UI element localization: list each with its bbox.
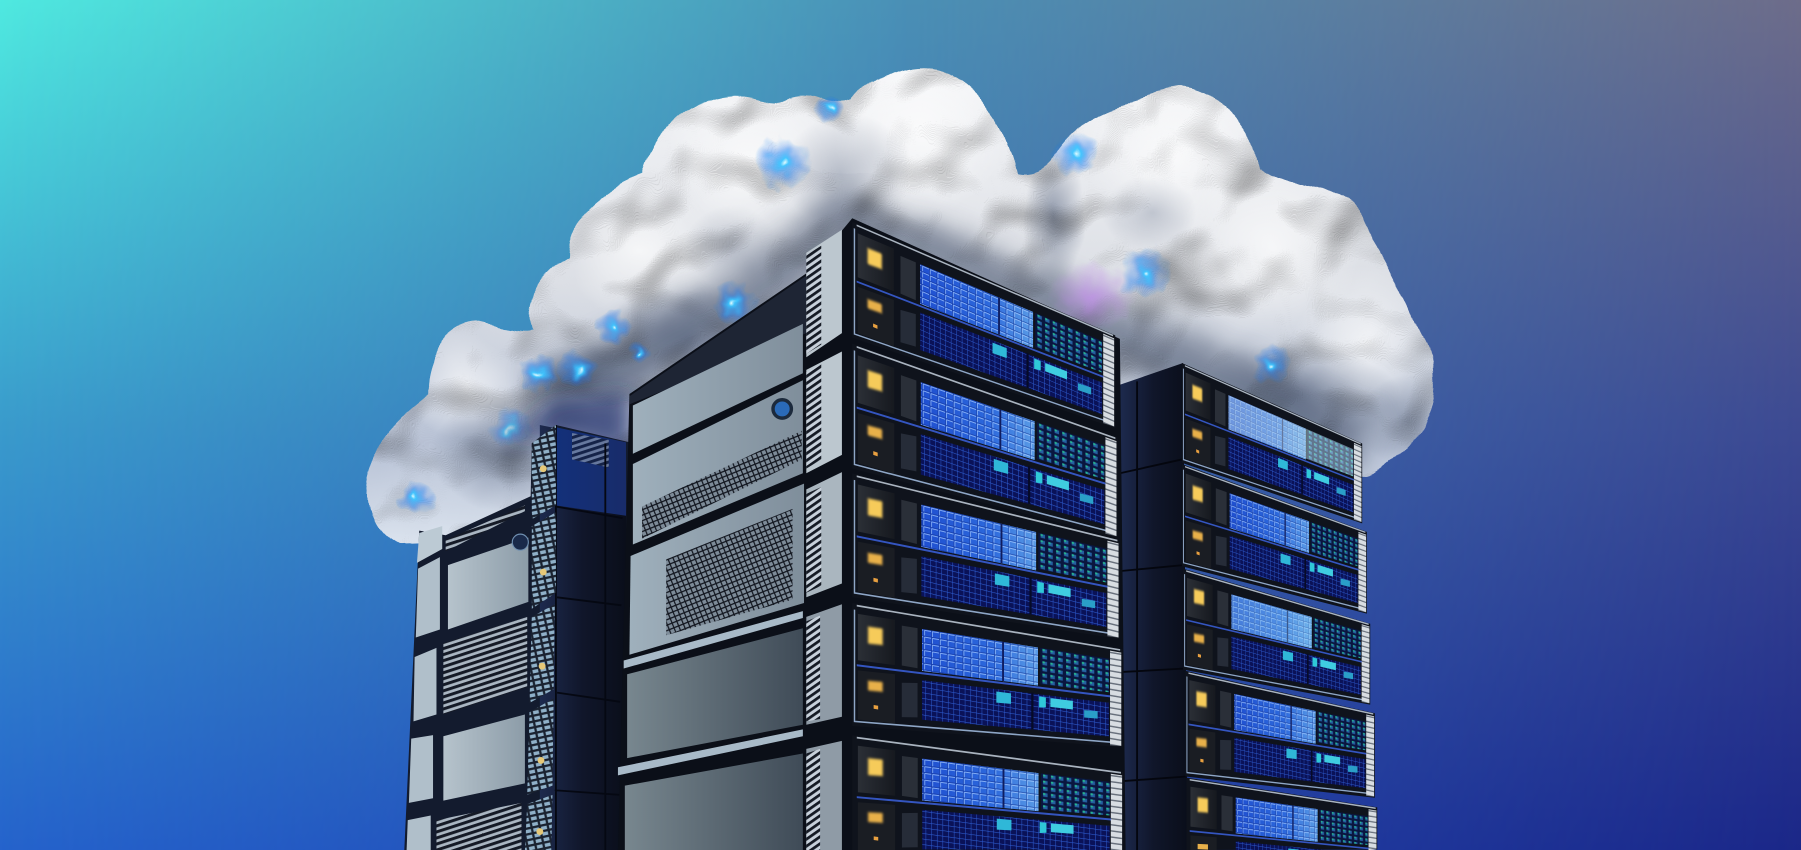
right rack unit 4 [1185, 671, 1375, 819]
centre rack side panels [618, 324, 804, 850]
right server rack [1120, 363, 1377, 850]
right rack unit 3 [1183, 569, 1370, 725]
centre rack unit 1 [852, 222, 1115, 451]
centre server rack [618, 218, 1126, 850]
centre rack unit 5 [852, 735, 1123, 850]
centre rack unit 3 [852, 473, 1120, 664]
centre rack unit 4 [852, 603, 1122, 772]
right rack unit 1 [1182, 363, 1362, 543]
left rack front panels [407, 505, 528, 850]
centre rack unit 2 [852, 343, 1118, 563]
right rack unit 2 [1182, 464, 1367, 634]
centre rack end caps [806, 230, 842, 850]
cloud [366, 46, 1453, 542]
glowing lights in the cloud [399, 95, 1290, 515]
left server rack [404, 393, 629, 850]
right rack unit 5 [1187, 778, 1377, 850]
